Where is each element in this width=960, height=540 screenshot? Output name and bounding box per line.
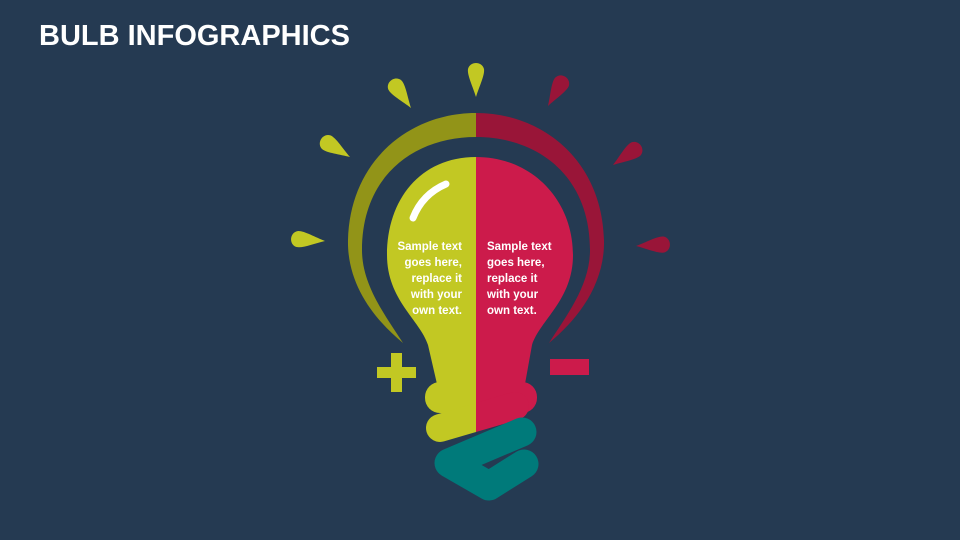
right text: goes here, — [487, 257, 545, 269]
left text: with your — [410, 289, 463, 301]
minus icon — [550, 359, 589, 375]
bulb left half — [387, 157, 476, 442]
outer arc left — [348, 113, 476, 343]
left text: replace it — [412, 273, 462, 285]
right text: own text. — [487, 305, 537, 317]
highlight — [413, 184, 446, 218]
right text: Sample text — [487, 241, 552, 253]
plus icon — [377, 353, 416, 392]
screw base — [449, 432, 524, 486]
title: BULB INFOGRAPHICS — [39, 20, 350, 52]
drops — [291, 63, 670, 254]
right text: replace it — [487, 273, 538, 285]
bulb right half — [476, 157, 573, 432]
left text: own text. — [412, 305, 462, 317]
left text: Sample text — [397, 241, 462, 253]
outer arc right — [476, 113, 604, 343]
right text: with your — [486, 289, 539, 301]
left text: goes here, — [404, 257, 462, 269]
